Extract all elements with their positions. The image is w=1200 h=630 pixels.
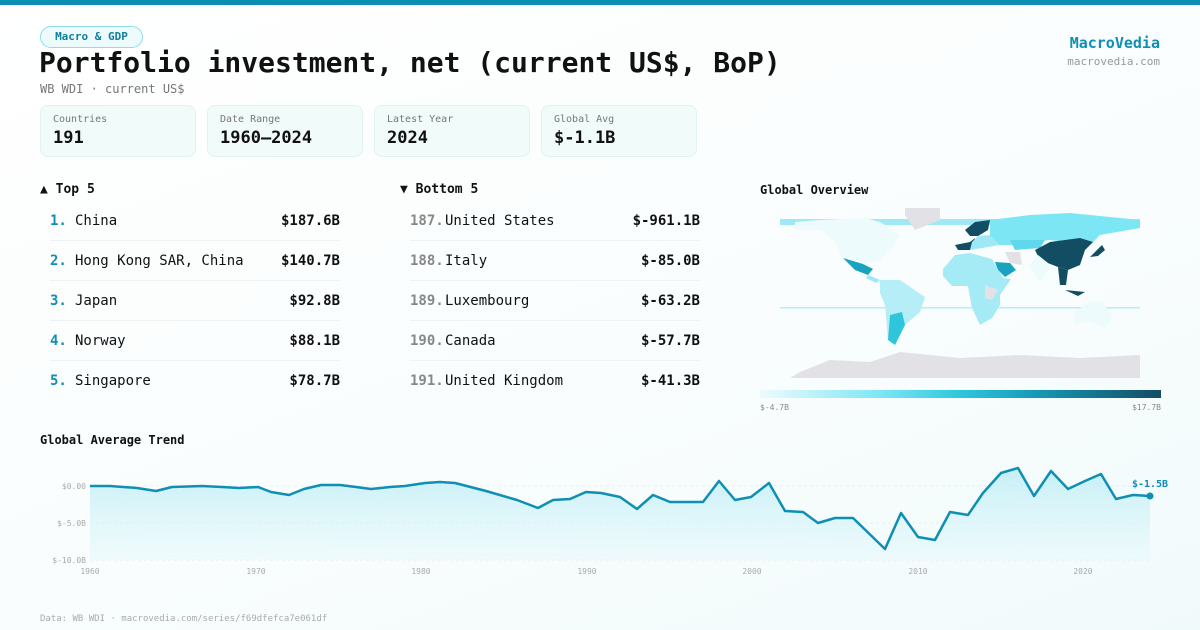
panel: top 5: $187.6B [281, 213, 340, 229]
card: latest year: 2024 [387, 128, 428, 148]
panel: top 5 [40, 182, 340, 389]
line chart: $0.00 [62, 482, 86, 491]
brand: macrovedia.com [1067, 55, 1160, 68]
panel: top 5: Hong Kong SAR, China [75, 253, 244, 269]
panel: top 5: $88.1B [289, 333, 340, 349]
panel: bottom 5: Luxembourg [445, 293, 529, 309]
card: global avg: Global Avg [554, 114, 614, 125]
brand [1067, 34, 1160, 68]
card: countries [40, 105, 196, 157]
heading: global overview: Global Overview [760, 183, 868, 197]
subtitle: WB WDI · current US$ [40, 82, 184, 96]
line chart: 1990 [577, 567, 597, 576]
panel: bottom 5: $-63.2B [641, 293, 700, 309]
panel: bottom 5: United Kingdom [445, 373, 563, 389]
card: date range [207, 105, 363, 157]
color legend: $17.7B [1132, 403, 1161, 412]
panel: top 5: 2. [50, 253, 67, 269]
card: date range: Date Range [220, 114, 280, 125]
card: latest year: Latest Year [387, 114, 453, 125]
top bar [0, 0, 1200, 5]
panel: top 5: China [75, 213, 117, 229]
panel: bottom 5: 189. [410, 293, 444, 309]
card: global avg: $-1.1B [554, 128, 615, 148]
panel: bottom 5: $-57.7B [641, 333, 700, 349]
line chart: $-10.0B [52, 556, 86, 565]
card: date range: 1960–2024 [220, 128, 312, 148]
panel: bottom 5: $-85.0B [641, 253, 700, 269]
card: countries: 191 [53, 128, 84, 148]
line chart: $-5.0B [57, 519, 86, 528]
heading top 5: ▲ Top 5 [40, 182, 95, 197]
panel: bottom 5: $-961.1B [633, 213, 700, 229]
panel: top 5: 3. [50, 293, 67, 309]
line chart: $-1.5B [1132, 479, 1168, 490]
panel: top 5: $78.7B [289, 373, 340, 389]
category pill [40, 26, 143, 48]
color legend: $-4.7B [760, 403, 789, 412]
panel: top 5: 1. [50, 213, 67, 229]
panel: top 5: Singapore [75, 373, 151, 389]
line chart: 1960 [80, 567, 100, 576]
panel: bottom 5 [400, 182, 700, 389]
card: countries: Countries [53, 114, 107, 125]
panel: bottom 5: $-41.3B [641, 373, 700, 389]
heading bottom 5: ▼ Bottom 5 [400, 182, 478, 197]
panel: bottom 5: 191. [410, 373, 444, 389]
card: global avg [541, 105, 697, 157]
line chart: 1970 [246, 567, 266, 576]
panel: bottom 5: 188. [410, 253, 444, 269]
panel: bottom 5: Italy [445, 253, 487, 269]
panel: top 5: 4. [50, 333, 67, 349]
heading: global average trend: Global Average Trend [40, 433, 184, 447]
panel: top 5: $92.8B [289, 293, 340, 309]
line chart: 2000 [742, 567, 762, 576]
color legend [760, 390, 1161, 412]
panel: bottom 5: United States [445, 213, 555, 229]
card: latest year [374, 105, 530, 157]
panel: top 5: $140.7B [281, 253, 340, 269]
footer source: Data: WB WDI · macrovedia.com/series/f69dfefca7e061df [40, 614, 327, 624]
panel: top 5: 5. [50, 373, 67, 389]
stat cards [40, 105, 697, 157]
panel: bottom 5: 190. [410, 333, 444, 349]
panel: bottom 5: Canada [445, 333, 496, 349]
panel: bottom 5: 187. [410, 213, 444, 229]
line chart: 2020 [1073, 567, 1093, 576]
line chart: 1980 [411, 567, 431, 576]
category pill: Macro & GDP [55, 30, 128, 43]
title: Portfolio investment, net (current US$, BoP) [39, 46, 781, 79]
panel: top 5: Japan [75, 293, 117, 309]
panel: top 5: Norway [75, 333, 126, 349]
line chart: 2010 [908, 567, 928, 576]
brand: MacroVedia [1070, 34, 1160, 52]
